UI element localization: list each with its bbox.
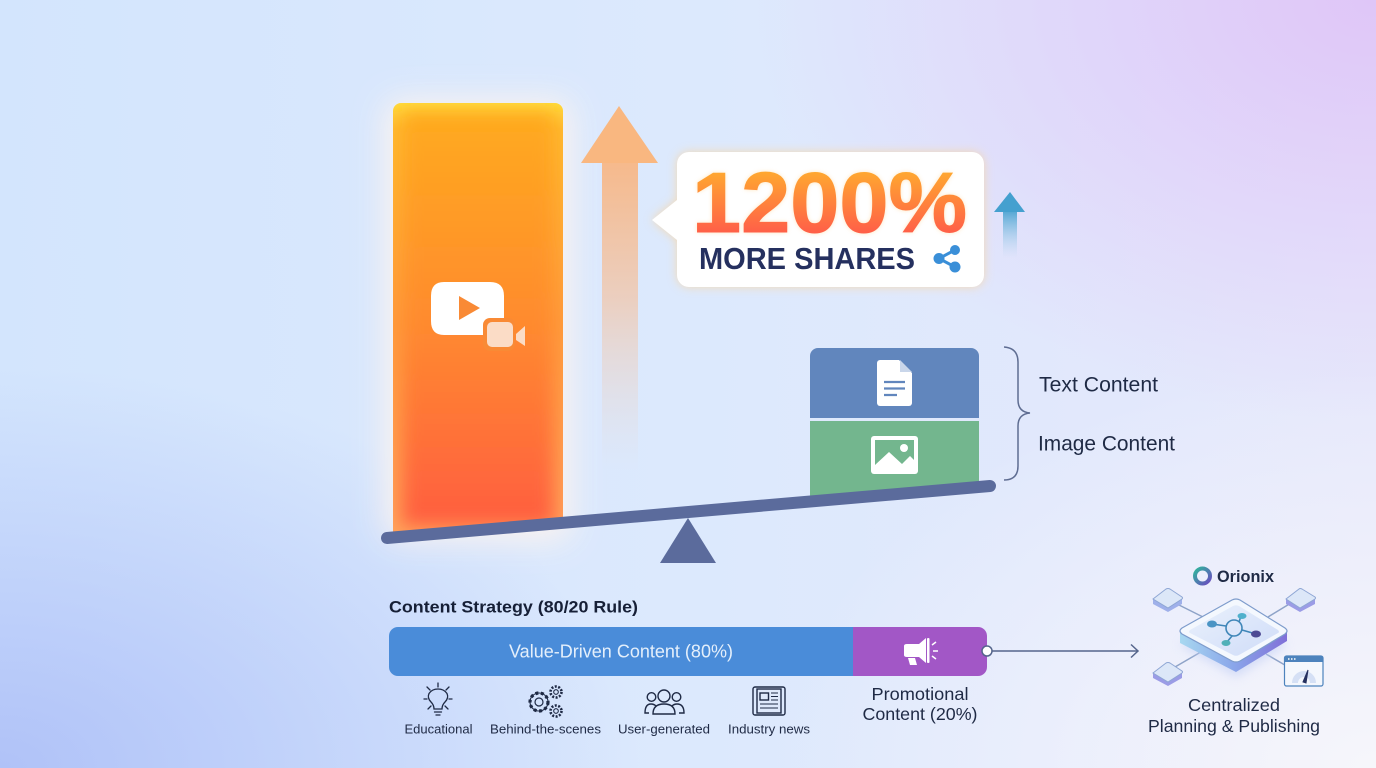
label: text content: Text Content <box>1039 374 1158 396</box>
icon: gears <box>530 686 562 716</box>
growth arrow <box>581 106 658 472</box>
node top left <box>1153 588 1182 612</box>
icon: bulb <box>424 683 452 715</box>
centralized planning label <box>1148 695 1320 736</box>
segment: value-driven: Value-Driven Content (80%) <box>509 642 733 662</box>
small up arrow <box>994 192 1025 258</box>
icon: image <box>871 436 918 474</box>
category: industry news <box>728 687 810 736</box>
promotional label <box>862 684 978 724</box>
centralized planning label: Centralized <box>1188 695 1280 715</box>
promotional label: Content (20%) <box>862 704 978 724</box>
category: behind-the-scenes <box>490 686 601 736</box>
icon: megaphone <box>904 638 938 665</box>
strategy bar <box>389 627 987 676</box>
label: image content: Image Content <box>1038 432 1175 456</box>
brace <box>1004 347 1030 480</box>
category: user-generated: User-generated <box>618 722 710 736</box>
category: behind-the-scenes: Behind-the-scenes <box>490 722 601 736</box>
category: educational <box>404 683 472 736</box>
logo: orionix: Orionix <box>1217 567 1275 586</box>
icon: video play <box>431 282 525 351</box>
video bar <box>385 100 571 540</box>
hub connectors <box>1175 603 1291 668</box>
node bottom left <box>1153 662 1182 686</box>
segment: promotional <box>853 627 987 676</box>
icon: newspaper <box>753 687 785 715</box>
connector arrow <box>982 644 1138 658</box>
centralized planning label: Planning & Publishing <box>1148 716 1320 736</box>
hub network <box>1207 613 1261 646</box>
icon: people <box>645 690 684 714</box>
seesaw beam <box>387 486 990 538</box>
hub platform <box>1180 599 1287 672</box>
hub shadow <box>1180 615 1287 677</box>
more shares label: MORE SHARES <box>699 241 915 276</box>
callout: 1200% more shares <box>652 152 984 287</box>
node top right <box>1286 588 1316 612</box>
category: educational: Educational <box>404 722 472 736</box>
promotional label: Promotional <box>872 684 968 704</box>
category: industry news: Industry news <box>728 722 810 736</box>
dashboard window <box>1284 656 1323 686</box>
image content block <box>810 421 979 500</box>
hub illustration <box>1153 588 1323 686</box>
big number: 1200% <box>692 156 967 251</box>
segment: value-driven <box>389 627 853 676</box>
icon: document <box>877 360 912 406</box>
icon: share <box>934 245 960 272</box>
strategy heading: Content Strategy (80/20 Rule) <box>389 598 638 616</box>
text content block <box>810 348 979 418</box>
seesaw fulcrum <box>660 518 716 563</box>
big number: 1200% <box>692 156 967 251</box>
category: user-generated <box>618 690 710 736</box>
